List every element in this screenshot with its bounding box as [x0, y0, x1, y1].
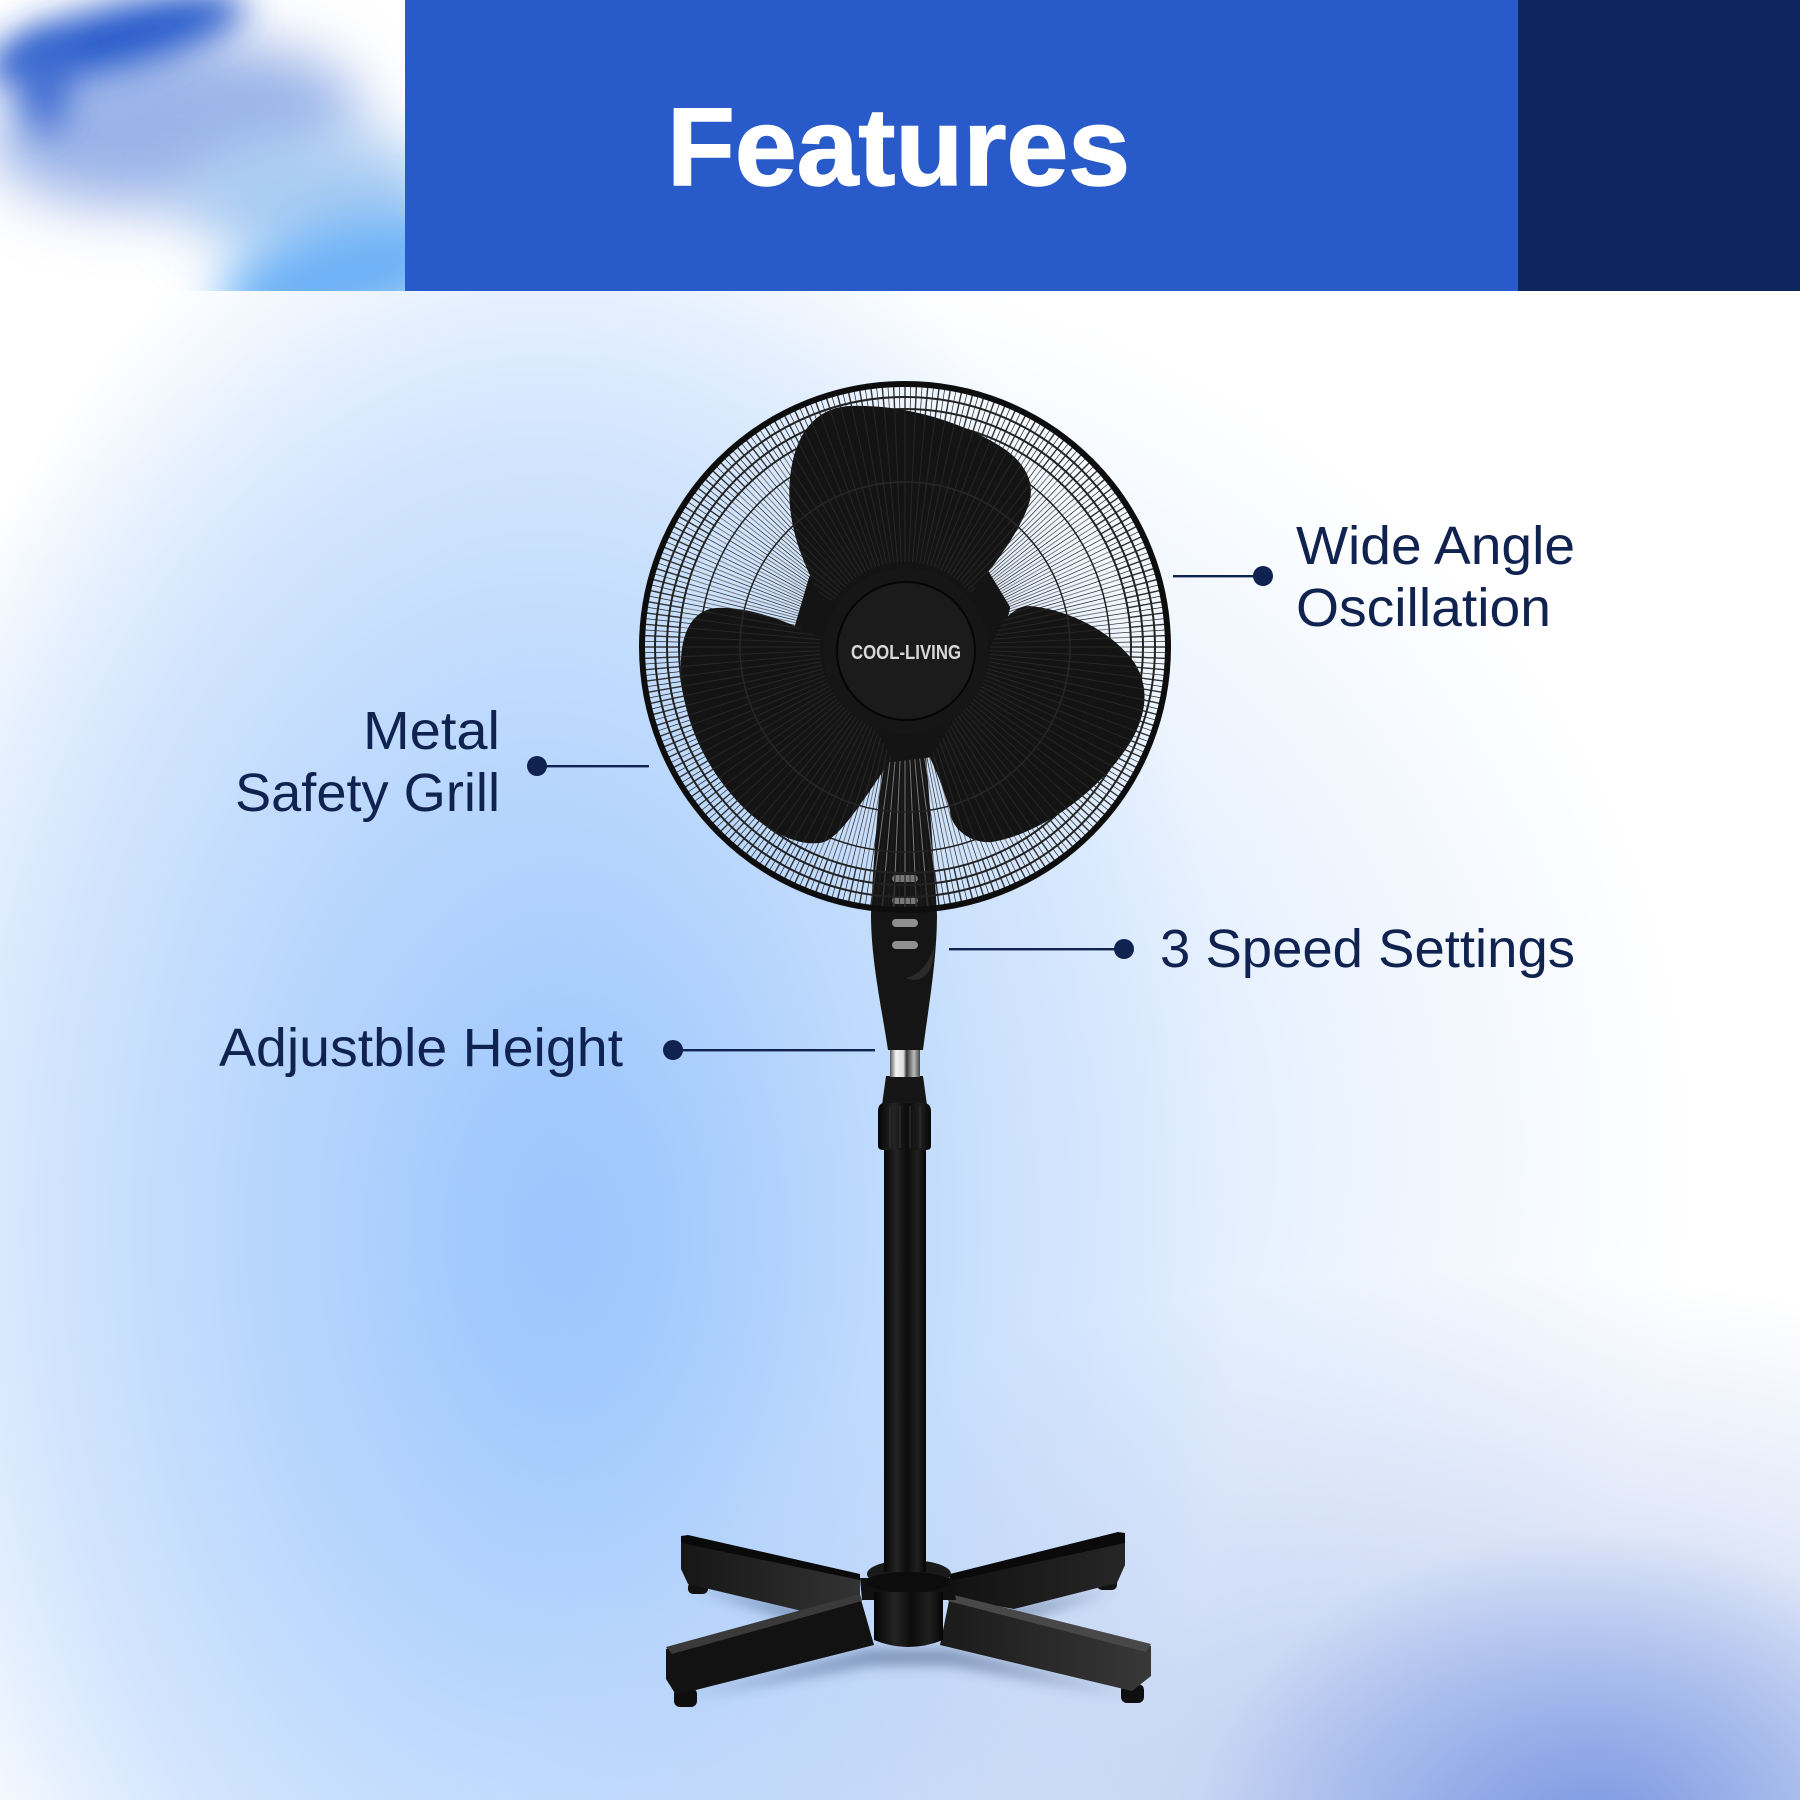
title: Features	[667, 86, 1130, 209]
callout: 3 speed settings	[949, 919, 1575, 979]
blade: right	[930, 606, 1144, 842]
safety grill	[611, 353, 1199, 941]
callout: adjustable height: Adjustble Height	[219, 1018, 623, 1078]
grill spokes	[617, 359, 1193, 935]
callout: wide angle oscillation	[1173, 516, 1575, 638]
logo: COOL-LIVING	[851, 642, 961, 664]
back left arm	[681, 1535, 860, 1611]
blades	[681, 406, 1144, 843]
fan illustration	[639, 381, 1171, 1707]
height collar	[878, 1076, 931, 1150]
base shadow	[680, 1585, 1130, 1698]
callout: metal safety grill: Metal	[363, 701, 500, 761]
base hub	[860, 1560, 956, 1647]
front left arm	[666, 1594, 874, 1707]
blade: top	[789, 406, 1031, 606]
blade: left	[681, 608, 892, 843]
callout: 3 speed settings: 3 Speed Settings	[1160, 919, 1575, 979]
callout: wide angle oscillation: Wide Angle	[1296, 516, 1575, 576]
chrome sleeve	[890, 1050, 920, 1077]
neck buttons	[892, 875, 935, 980]
callout: wide angle oscillation: Oscillation	[1296, 578, 1551, 638]
motor neck	[871, 730, 937, 1050]
pole	[884, 1140, 926, 1572]
blade ribs	[681, 406, 1144, 844]
callout: metal safety grill	[235, 701, 649, 823]
corner gradient artwork	[0, 0, 405, 291]
blade root	[799, 560, 1006, 758]
callout: adjustable height	[219, 1018, 875, 1078]
front right arm	[940, 1594, 1151, 1703]
header bar	[405, 0, 1800, 291]
callout: metal safety grill: Safety Grill	[235, 763, 500, 823]
grill rim	[642, 384, 1168, 910]
back right arm	[950, 1532, 1125, 1609]
hub	[823, 568, 989, 734]
